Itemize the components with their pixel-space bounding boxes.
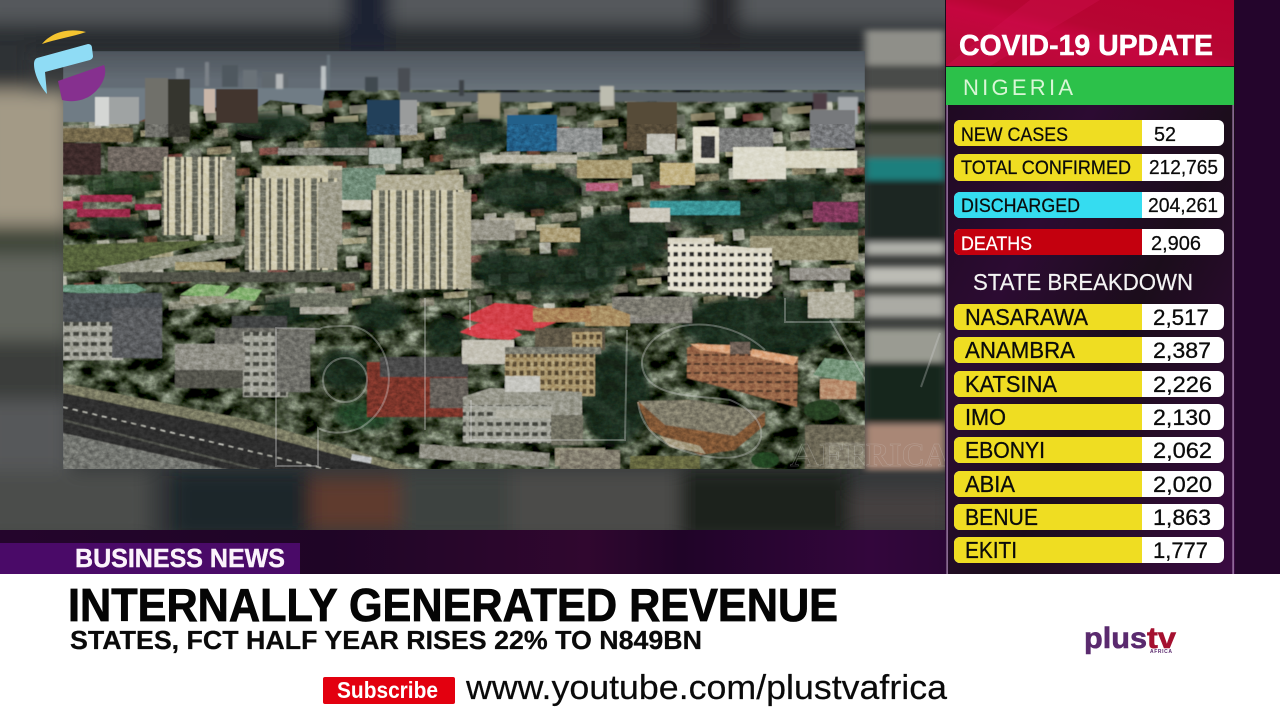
watermark [275, 298, 865, 467]
row: Ekiti: EKITI [965, 537, 1017, 563]
Plus TV Africa logo [1084, 622, 1176, 655]
row: discharged: DISCHARGED [961, 195, 1080, 217]
watermark outside photo: RICA [866, 437, 948, 474]
sub-headline: STATES, FCT HALF YEAR RISES 22% TO N849BN [70, 627, 702, 655]
row: Ekiti [954, 537, 1224, 563]
Plus TV Africa logo: AFRICA [1150, 649, 1172, 655]
photo: aerial view of city [63, 51, 865, 469]
towers [162, 157, 471, 289]
lower-third band [0, 530, 946, 574]
row: new cases [954, 120, 1224, 146]
row: Katsina [954, 371, 1224, 397]
white flat roof building [463, 376, 583, 445]
path and walls [95, 245, 245, 275]
row: Ekiti: 1,777 [1153, 538, 1208, 563]
channel url: www.youtube.com/plustvafrica [465, 669, 947, 707]
subheader: Nigeria: NIGERIA [963, 75, 1073, 100]
logo purple shape [58, 65, 105, 101]
header: COVID-19 update [946, 0, 1234, 66]
watermark: AFRICA [790, 437, 949, 474]
red roofs left [63, 195, 161, 217]
row: new cases: NEW CASES [961, 124, 1068, 146]
row: Ebonyi: 2,062 [1153, 438, 1212, 463]
sky [63, 51, 865, 91]
logo yellow arc [42, 30, 86, 44]
headline: INTERNALLY GENERATED REVENUE [68, 579, 838, 631]
row: Benue: BENUE [965, 504, 1038, 530]
shoreline [63, 433, 230, 470]
business news tag: BUSINESS NEWS [75, 543, 285, 573]
distant skyline [63, 55, 865, 126]
row: Katsina: 2,226 [1153, 372, 1212, 397]
row: Nasarawa: 2,517 [1153, 305, 1209, 330]
palm and scrub [804, 400, 840, 420]
row: Imo [954, 404, 1224, 430]
tan office building [505, 308, 605, 396]
car on road [351, 454, 372, 463]
row: Abia [954, 471, 1224, 497]
coastal road [63, 393, 395, 470]
heading: state breakdown: STATE BREAKDOWN [973, 269, 1193, 295]
background buildings [63, 78, 858, 326]
green roofs [63, 284, 147, 296]
row: Imo: IMO [965, 404, 1006, 430]
row: discharged [954, 192, 1224, 218]
panel background [945, 0, 1235, 574]
row: Abia: 2,020 [1153, 472, 1212, 497]
row: discharged: 204,261 [1148, 195, 1218, 217]
row: Benue [954, 504, 1224, 530]
red brick building [367, 357, 468, 417]
right margin strip [1234, 0, 1280, 574]
logo: Plus TV emblem [34, 30, 105, 101]
logo light-blue stroke [34, 44, 93, 94]
row: Benue: 1,863 [1153, 505, 1211, 530]
row: deaths: 2,906 [1151, 233, 1201, 255]
row: Anambra: 2,387 [1153, 338, 1211, 363]
small rooftops [63, 100, 865, 310]
blurred right strip of background [865, 30, 945, 470]
row: new cases: 52 [1154, 124, 1176, 146]
row: total confirmed [954, 154, 1224, 181]
row: Ebonyi [954, 437, 1224, 463]
verge [63, 383, 420, 470]
photo grain [63, 124, 865, 469]
row: deaths [954, 229, 1224, 255]
white footer [0, 574, 1280, 720]
Plus TV Africa logo: plus [1084, 622, 1147, 655]
red roof building [460, 303, 566, 364]
watermark outside photo [866, 333, 948, 474]
row: Abia: ABIA [965, 471, 1016, 497]
mid grey building [175, 316, 315, 397]
low wall along the road [419, 444, 550, 467]
lagoon water [63, 84, 325, 122]
header: COVID-19 update: COVID-19 UPDATE [959, 30, 1213, 62]
field [63, 240, 220, 272]
low white building [808, 292, 854, 318]
row: Nasarawa: NASARAWA [965, 304, 1089, 330]
green roof tan building [813, 358, 863, 399]
row: Anambra [954, 337, 1224, 363]
row: deaths: DEATHS [961, 233, 1032, 255]
subheader: Nigeria [946, 67, 1234, 105]
row: Katsina: KATSINA [965, 371, 1058, 397]
blurred video background [0, 0, 980, 540]
white office block [668, 238, 772, 298]
row: total confirmed: TOTAL CONFIRMED [961, 157, 1131, 179]
roundhouse building [637, 400, 765, 455]
row: Nasarawa [954, 304, 1224, 330]
row: total confirmed: 212,765 [1149, 157, 1218, 179]
panel: COVID-19 update sidebar [945, 0, 1235, 574]
Plus TV Africa logo: tv [1147, 622, 1176, 655]
row: Anambra: ANAMBRA [965, 337, 1076, 363]
row: Ebonyi: EBONYI [965, 437, 1045, 463]
flat roof grey [612, 298, 692, 318]
city ground [63, 90, 865, 470]
tree masses [84, 113, 865, 445]
subscribe button: Subscribe [337, 677, 438, 703]
row: Imo: 2,130 [1153, 405, 1211, 430]
brown building [687, 342, 798, 407]
left grey building [63, 293, 162, 360]
